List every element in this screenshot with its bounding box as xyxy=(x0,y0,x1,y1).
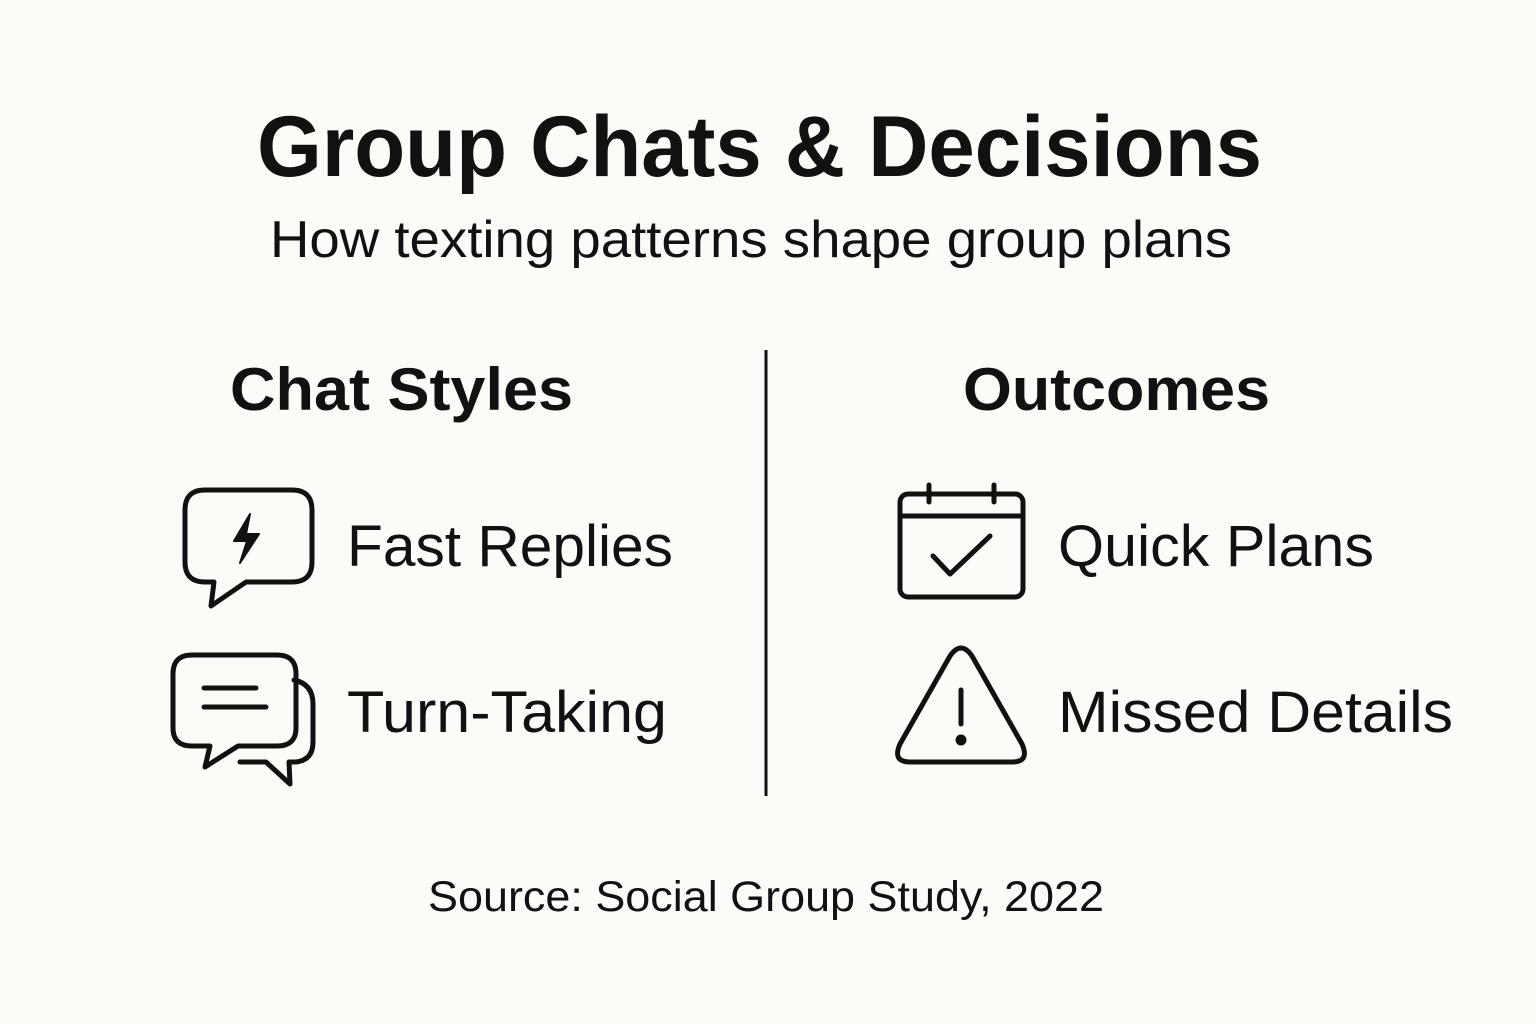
heading: Chat Styles: Chat Styles xyxy=(230,356,573,423)
icon: calendar check xyxy=(900,485,1023,597)
heading: Outcomes: Outcomes xyxy=(963,356,1270,423)
label: Fast Replies: Fast Replies xyxy=(347,514,673,579)
label: Quick Plans: Quick Plans xyxy=(1058,514,1374,579)
label: Missed Details: Missed Details xyxy=(1058,680,1453,745)
label: Turn-Taking: Turn-Taking xyxy=(347,680,667,745)
icon: double chat bubbles xyxy=(173,655,313,784)
title: Group Chats & Decisions xyxy=(257,99,1262,195)
subtitle: How texting patterns shape group plans xyxy=(270,211,1232,269)
icon: lightning chat bubble xyxy=(185,490,312,606)
source note: Source: Social Group Study, 2022 xyxy=(428,873,1104,921)
icon: warning triangle xyxy=(898,648,1024,762)
